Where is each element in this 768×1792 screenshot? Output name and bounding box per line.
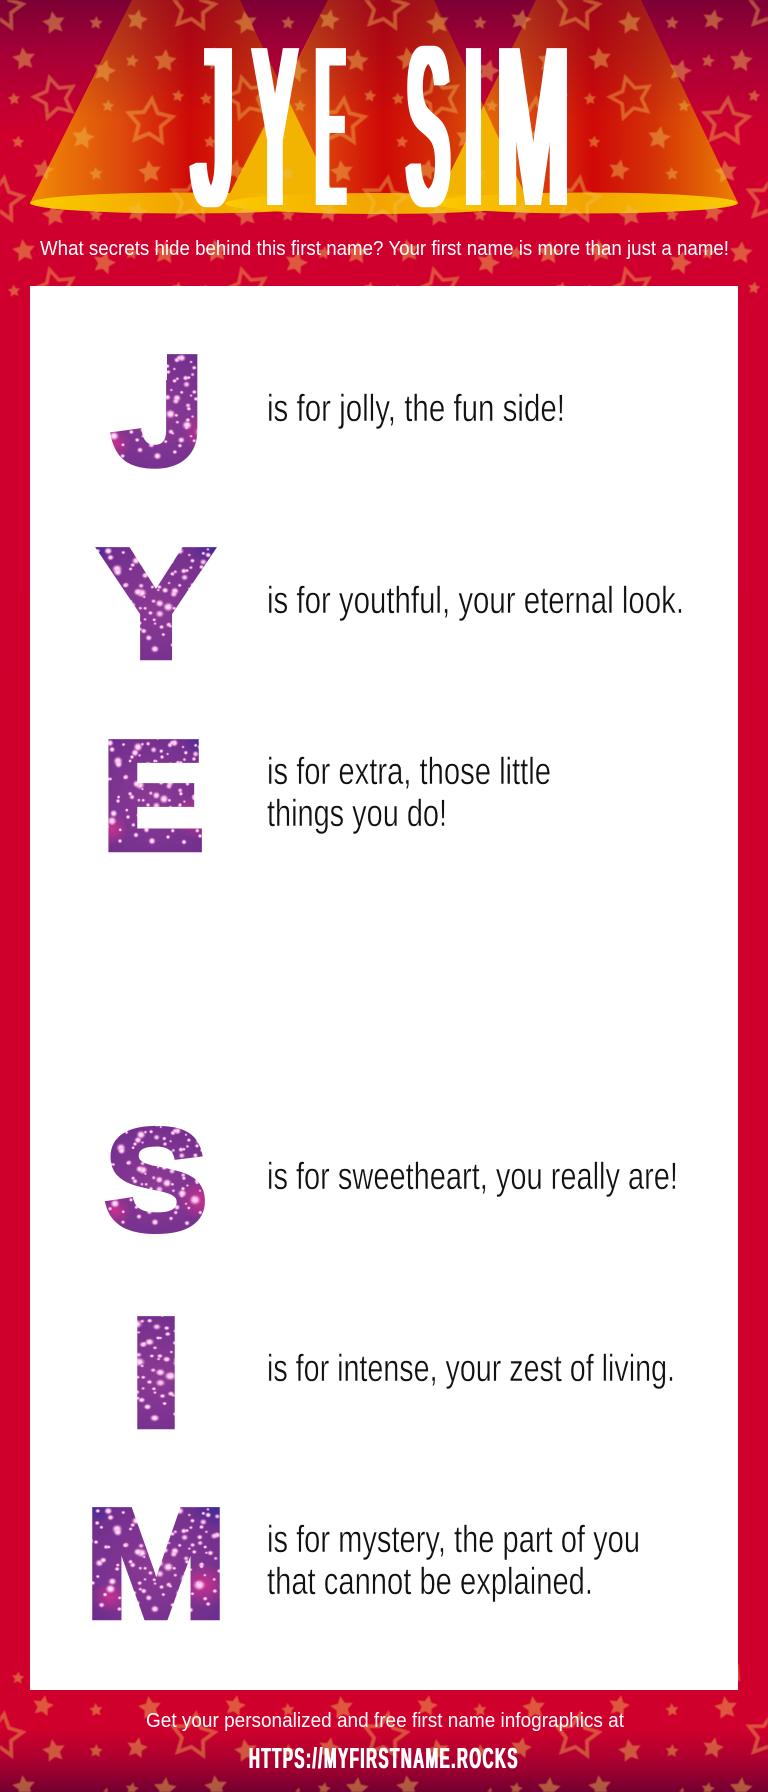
title: M bbox=[497, 0, 569, 254]
title: I bbox=[466, 0, 481, 255]
text: M lines bbox=[267, 1519, 640, 1603]
panel: white content bbox=[30, 286, 738, 1690]
letter J: J bbox=[112, 325, 205, 498]
footer url: HTTPS://MYFIRSTNAME.ROCKS bbox=[249, 1743, 519, 1775]
letter E: E bbox=[101, 709, 205, 882]
letter S: S bbox=[104, 1100, 208, 1260]
star pattern: bottom bbox=[0, 1664, 768, 1792]
footer text: Get your personalized and free first name infographics at bbox=[146, 1710, 624, 1732]
title: S bbox=[407, 0, 449, 254]
text: E lines: is for extra, those little bbox=[267, 751, 551, 793]
text: M lines: is for mystery, the part of you bbox=[267, 1519, 640, 1561]
letter I: I bbox=[128, 1286, 184, 1460]
star pattern: top bbox=[0, 0, 768, 302]
title: Y bbox=[254, 0, 296, 254]
letter Y: Y bbox=[99, 517, 213, 690]
title: J bbox=[193, 0, 233, 254]
title: E bbox=[318, 0, 343, 254]
title bbox=[193, 0, 569, 255]
text: E lines: things you do! bbox=[267, 793, 447, 835]
letter M: M bbox=[84, 1477, 228, 1650]
spotlights bbox=[30, 0, 738, 214]
text: M lines: that cannot be explained. bbox=[267, 1561, 593, 1603]
text: E lines bbox=[267, 751, 551, 835]
text: J line: is for jolly, the fun side! bbox=[267, 388, 565, 430]
